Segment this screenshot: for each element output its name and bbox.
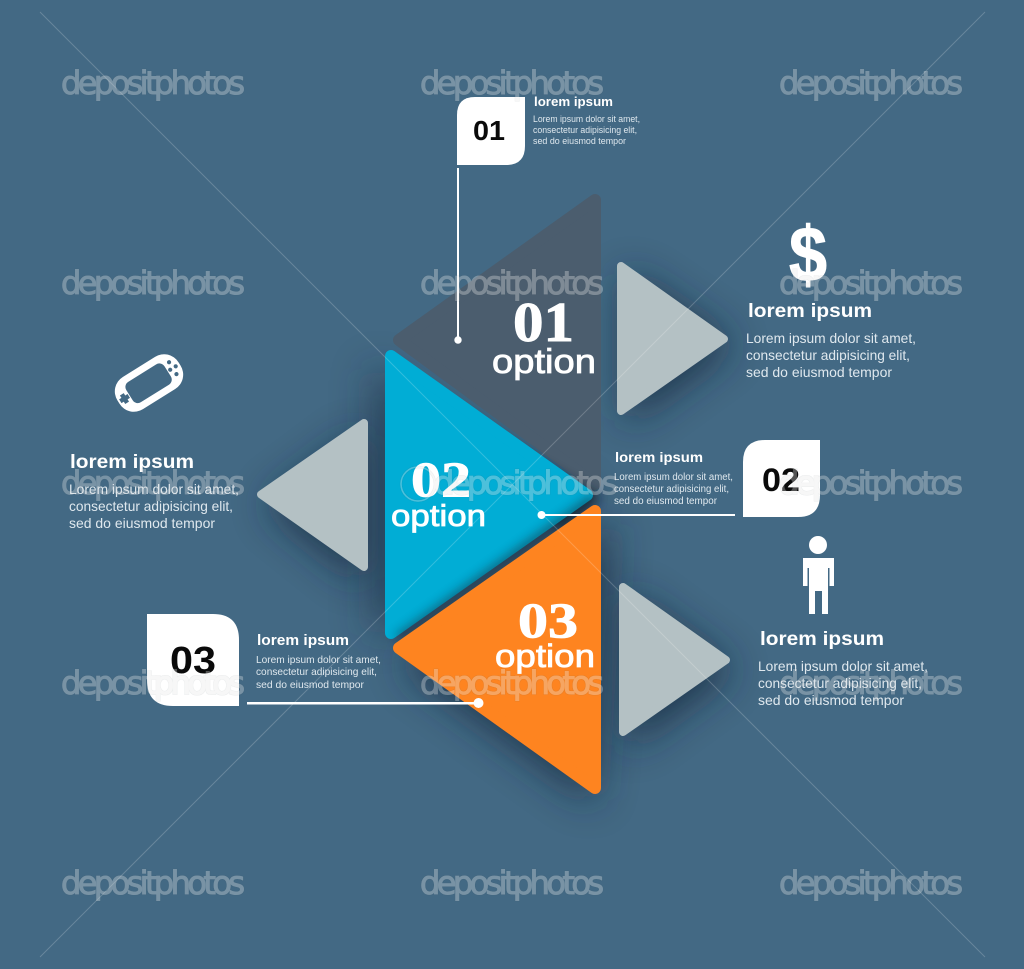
callout: 02 badge (743, 440, 820, 517)
heading: 02 option: option (391, 498, 486, 533)
text block: right top (746, 300, 916, 380)
watermark: stock photo logos: depositphotos (779, 64, 963, 102)
watermark: stock photo logos: depositphotos (779, 264, 963, 302)
panel: option 01 dark triangle (399, 200, 595, 484)
text block: right bottom: Lorem ipsum dolor sit amet, (758, 658, 928, 674)
arrow: right top gray triangle (621, 266, 724, 411)
text block: right top: consectetur adipisicing elit, (746, 347, 910, 363)
watermark: stock photo logos: depositphotos (420, 664, 604, 702)
heading: 03 option: 03 (518, 592, 578, 648)
text block: right bottom (758, 628, 928, 708)
text block: 02 callout: sed do eiusmod tempor (614, 496, 718, 507)
heading: 03 option (495, 592, 595, 674)
watermark: stock photo logos: depositphotos (779, 664, 963, 702)
watermark: stock photo logos: depositphotos (420, 64, 604, 102)
heading: 02 option (391, 451, 486, 533)
text block: right top: Lorem ipsum dolor sit amet, (746, 330, 916, 346)
text block: 03 callout: sed do eiusmod tempor (256, 679, 364, 691)
heading: 01 option: 01 (513, 292, 574, 354)
text block: right bottom: sed do eiusmod tempor (758, 692, 904, 708)
arrow: left gray triangle (261, 423, 364, 567)
text block: left (69, 451, 239, 531)
text block: 02 callout: lorem ipsum (615, 449, 703, 465)
text block: 01 callout: consectetur adipisicing elit, (533, 125, 637, 135)
watermark: stock photo logos: depositphotos (61, 664, 245, 702)
triangle shadows (265, 270, 735, 805)
watermark: stock photo logos: depositphotos (420, 864, 604, 902)
callout: 03 connector line (247, 698, 484, 708)
text block: 01 callout: sed do eiusmod tempor (533, 136, 626, 146)
arrow: right bottom gray triangle (623, 587, 726, 732)
text block: 01 callout: Lorem ipsum dolor sit amet, (533, 114, 640, 124)
heading: 03 option: option (495, 638, 595, 674)
callout: 01 badge: 01 (473, 115, 505, 146)
text block: left: consectetur adipisicing elit, (69, 498, 233, 514)
text block: right bottom: lorem ipsum (760, 628, 884, 650)
text block: 02 callout: consectetur adipisicing elit, (614, 484, 729, 495)
text block: 03 callout (256, 633, 381, 691)
shadow under blue triangle edge (500, 440, 600, 530)
callout: 02 badge: 02 (762, 462, 800, 498)
text block: 01 callout (533, 95, 640, 146)
text block: 03 callout: Lorem ipsum dolor sit amet, (256, 654, 381, 666)
watermark: stock photo logos: depositphotos (61, 64, 245, 102)
text block: right bottom: consectetur adipisicing elit, (758, 675, 922, 691)
watermark: stock photo logos: depositphotos (779, 864, 963, 902)
callout: 02 connector line (538, 511, 735, 519)
heading: 01 option (492, 292, 596, 381)
text block: left: sed do eiusmod tempor (69, 515, 215, 531)
icon: game controller (108, 348, 190, 418)
callout: 03 badge (147, 614, 239, 706)
watermark: stock photo logos: depositphotos (779, 464, 963, 502)
watermark: stock photo logos: depositphotos (420, 264, 604, 302)
text block: 01 callout: lorem ipsum (534, 95, 613, 109)
watermark: stock photo logos: depositphotos (61, 864, 245, 902)
callout: 03 badge: 03 (170, 640, 216, 682)
watermark: stock photo logos: depositphotos (61, 464, 245, 502)
icon: person (803, 536, 834, 614)
panel: option 03 orange triangle (399, 511, 595, 788)
heading: 02 option: 02 (411, 451, 471, 507)
text block: 03 callout: lorem ipsum (257, 633, 349, 649)
text block: left: lorem ipsum (70, 451, 194, 473)
heading: 01 option: option (492, 343, 596, 381)
text block: left: Lorem ipsum dolor sit amet, (69, 481, 239, 497)
text block: right top: lorem ipsum (748, 300, 872, 322)
panel: option 02 blue triangle (391, 356, 587, 633)
text block: 02 callout: Lorem ipsum dolor sit amet, (614, 472, 733, 483)
text block: right top: sed do eiusmod tempor (746, 364, 892, 380)
icon: dollar sign: $ (789, 210, 827, 298)
callout: 01 connector line (454, 168, 462, 344)
shadow between blue and orange (395, 495, 600, 642)
text block: 03 callout: consectetur adipisicing elit, (256, 666, 377, 678)
watermark: stock photo logos (61, 64, 963, 902)
callout: 01 badge (457, 97, 525, 165)
watermark: stock photo logos: depositphotos (434, 464, 618, 502)
watermark: stock photo logos: depositphotos (61, 264, 245, 302)
text block: 02 callout (614, 449, 733, 507)
